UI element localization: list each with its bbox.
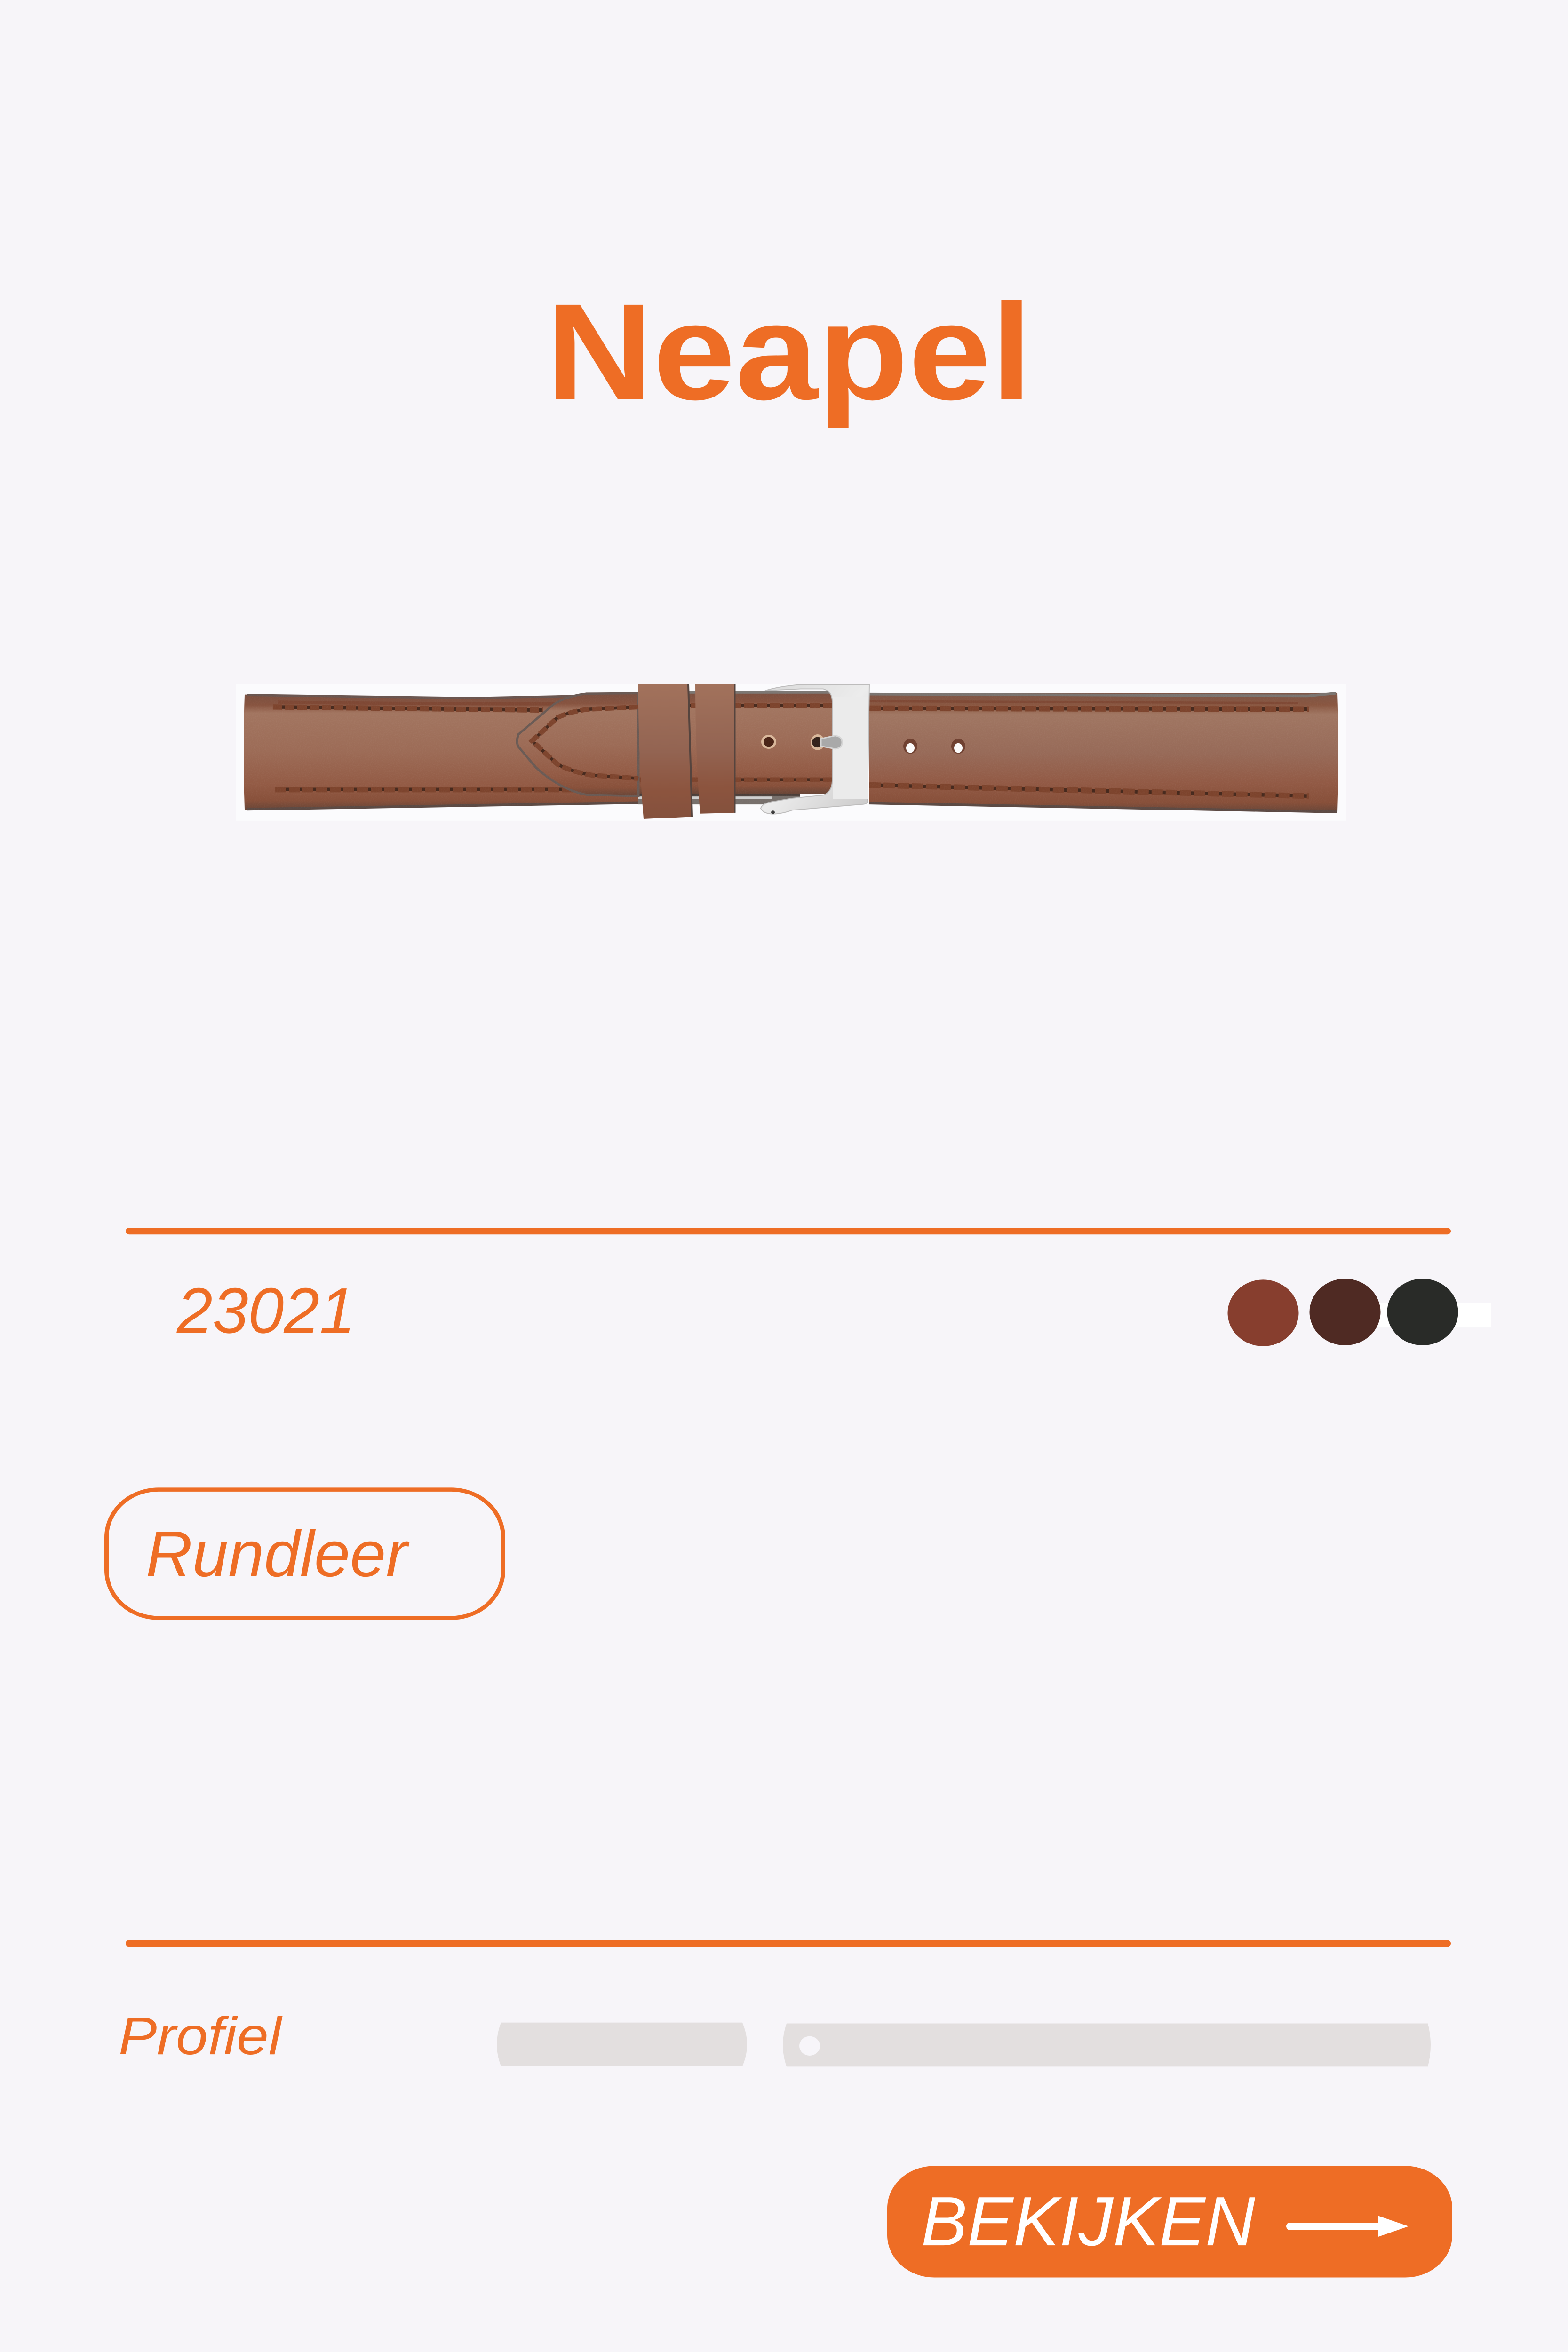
colour swatches <box>1228 1279 1491 1346</box>
strap keeper tip <box>517 693 638 796</box>
strap middle section <box>638 691 833 795</box>
buckle pin <box>821 736 842 749</box>
under layer of the strap <box>638 794 800 804</box>
strap right section <box>869 693 1338 812</box>
swatch: black <box>1387 1279 1458 1345</box>
material tag: Rundleer <box>146 1518 410 1590</box>
profile label: Profiel <box>119 2006 283 2066</box>
article number: 23021 <box>176 1274 355 1346</box>
button <box>887 2166 1452 2278</box>
strap holes <box>761 734 965 754</box>
product image: leather watch strap <box>236 684 1346 821</box>
swatch: cognac <box>1228 1279 1298 1346</box>
strap left section <box>244 693 638 810</box>
material tag <box>106 1490 503 1618</box>
strap loops <box>638 684 735 819</box>
profile bar: long with marker <box>783 2024 1431 2066</box>
swatch: dark brown <box>1310 1279 1380 1345</box>
profile bar: short <box>497 2023 747 2066</box>
divider: top <box>126 1228 1451 1234</box>
arrow <box>1286 2216 1409 2237</box>
leather grain <box>253 699 1324 807</box>
button: BEKIJKEN <box>921 2183 1255 2260</box>
title: Neapel <box>546 275 1032 429</box>
buckle <box>761 684 869 814</box>
divider: bottom <box>126 1940 1451 1947</box>
